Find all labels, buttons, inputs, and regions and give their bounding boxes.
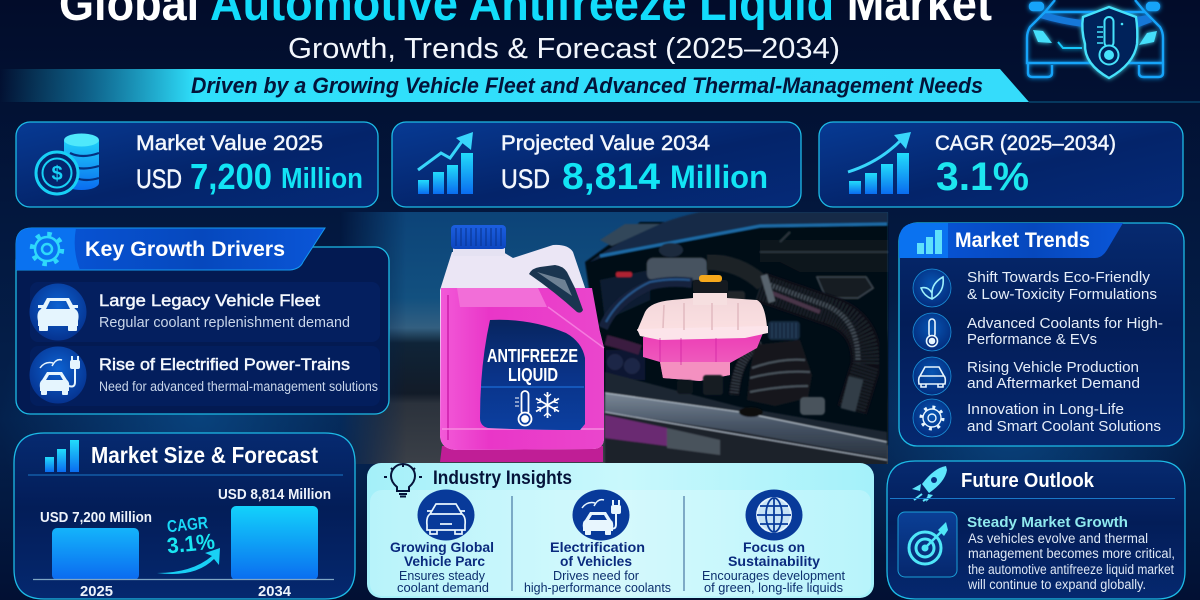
coolant reservoir: [637, 275, 768, 381]
heading: Industry Insights: [433, 467, 572, 489]
text: steady market growth: As vehicles evolve and thermal: [968, 531, 1148, 546]
text: electrification: of Vehicles: [560, 554, 632, 569]
text: steady market growth: will continue to expand globally.: [967, 577, 1146, 592]
icon: target: [898, 512, 957, 577]
radiator support: [605, 372, 887, 466]
icon: rocket: [912, 466, 947, 502]
icon: EV plug: [582, 500, 621, 535]
text: projected value figure: USD: [501, 164, 550, 194]
text: sustainability: Focus on: [743, 540, 805, 555]
text: eco-friendly: & Low-Toxicity Formulations: [967, 287, 1157, 303]
panel: projected value 2034: [392, 122, 801, 207]
bar label 2034 value: USD 8,814 Million: [218, 487, 331, 503]
heading: Key Growth Drivers: [85, 238, 285, 261]
insight: electrification: [524, 490, 671, 595]
text: vehicle production: Rising Vehicle Production: [967, 360, 1139, 376]
icon: snowflake: [536, 392, 559, 418]
arrow: [157, 548, 220, 574]
text: CAGR label: CAGR (2025–2034): [935, 132, 1116, 155]
text: legacy fleet: Large Legacy Vehicle Fleet: [99, 291, 320, 310]
text: advanced coolants: Advanced Coolants for High-: [967, 316, 1163, 332]
banner: [0, 69, 1200, 102]
icon: leaf: [921, 277, 943, 299]
text: legacy fleet: [99, 291, 350, 331]
text: steady market growth: [967, 514, 1175, 592]
text: sustainability: of green, long-life liquids: [704, 581, 843, 595]
axis label 2025: 2025: [80, 584, 113, 600]
panel: market size and forecast: [14, 433, 355, 600]
icon: bars: [45, 440, 79, 472]
text: electrified power-trains: Rise of Electrified Power-Trains: [99, 355, 350, 374]
text: electrification: Electrification: [550, 540, 645, 555]
text: innovation: [967, 402, 1161, 435]
text: advanced coolants: Performance & EVs: [967, 332, 1097, 348]
panel: CAGR: [819, 122, 1183, 207]
text: vehicle production: and Aftermarket Demand: [967, 376, 1140, 392]
trend: vehicle production: [913, 357, 1140, 395]
text: electrification: [524, 540, 671, 595]
icon: coins: $: [51, 163, 63, 185]
icon: gear: [921, 407, 943, 429]
text: electrification: high-performance coolants: [524, 581, 671, 595]
text: CAGR value: 3.1%: [936, 155, 1029, 199]
trend: eco-friendly: [913, 269, 1157, 307]
panel: industry insights: [367, 463, 874, 598]
text: electrified power-trains: Need for advanced thermal-management solutions: [99, 379, 378, 394]
header tab: [899, 223, 1123, 258]
text: projected value label: Projected Value 2034: [501, 132, 710, 155]
hose: [603, 262, 866, 410]
text: steady market growth: the automotive antifreeze liquid market: [968, 562, 1174, 577]
icon: light bulb: [384, 464, 422, 496]
text: vehicle parc: Growing Global: [390, 540, 494, 555]
text: sustainability: Sustainability: [728, 554, 821, 569]
icon: CAGR chart: [848, 132, 911, 194]
trend: advanced coolants: [913, 313, 1163, 351]
icon: globe: [757, 498, 791, 532]
text: projected value figure: Million: [670, 159, 768, 195]
text: market value label: Market Value 2025: [136, 132, 323, 155]
bottle label: ANTIFREEZE: [487, 346, 578, 366]
icon: car: [427, 504, 465, 534]
icon: car with thermometer shield: [1027, 0, 1163, 78]
text: projected value figure: [501, 156, 768, 197]
icon: thermometer: [926, 319, 938, 346]
text: vehicle parc: Ensures steady: [399, 569, 486, 583]
text: electrified power-trains: [99, 355, 378, 394]
text: steady market growth: Steady Market Growth: [967, 514, 1128, 531]
bottle reflection: [440, 446, 603, 462]
panel: market trends: [899, 223, 1184, 446]
insight: vehicle parc: [390, 490, 494, 595]
bottle label: LIQUID: [508, 365, 558, 385]
bar label 2025 value: USD 7,200 Million: [40, 510, 152, 526]
panel: future outlook: [887, 461, 1185, 599]
icon: EV with plug: [40, 356, 80, 395]
icon: coins: [36, 134, 99, 194]
icon: car: [919, 367, 945, 387]
driver: electrified power-trains: [30, 346, 380, 406]
text: eco-friendly: Shift Towards Eco-Friendly: [967, 270, 1151, 286]
text: sustainability: [702, 540, 846, 595]
engine parts: [727, 291, 812, 406]
photo: bottle and engine bay: [340, 212, 888, 466]
bottle: [440, 225, 604, 450]
panel: market value 2025: [16, 122, 378, 207]
text: electrification: Drives need for: [553, 569, 639, 583]
insight: sustainability: [702, 490, 846, 595]
heading: Market Trends: [955, 229, 1090, 252]
engine bay background: [585, 212, 888, 445]
icon: thermometer: [515, 391, 532, 426]
text: eco-friendly: [967, 270, 1157, 303]
text: vehicle parc: Vehicle Parc: [404, 554, 485, 569]
icon: car: [37, 298, 79, 331]
text: market value figure: USD: [136, 164, 182, 194]
heading: Market Size & Forecast: [91, 442, 318, 468]
text: legacy fleet: Regular coolant replenishment demand: [99, 315, 350, 331]
header tab: [16, 228, 325, 270]
text: vehicle parc: coolant demand: [397, 581, 489, 595]
CAGR callout: CAGR: [166, 513, 209, 536]
icon: gear: [32, 234, 62, 264]
text: vehicle parc: [390, 540, 494, 595]
axis label 2034: 2034: [258, 584, 291, 600]
text: innovation: and Smart Coolant Solutions: [967, 419, 1161, 435]
text: steady market growth: management becomes more critical,: [968, 546, 1175, 561]
icon: bars: [917, 230, 942, 254]
text: projected value figure: 8,814: [562, 156, 660, 197]
heading: Future Outlook: [961, 469, 1095, 492]
trend: innovation: [913, 399, 1161, 437]
icon: growth chart: [418, 132, 473, 194]
text: market value figure: 7,200: [190, 156, 272, 197]
panel: key growth drivers: [16, 228, 389, 414]
bar chart: [33, 487, 334, 600]
text: market value figure: [136, 156, 363, 197]
text: innovation: Innovation in Long-Life: [967, 402, 1124, 418]
text: advanced coolants: [967, 316, 1163, 348]
banner: Driven by a Growing Vehicle Fleet and Advanced Thermal-Management Needs: [191, 73, 983, 98]
CAGR callout: [164, 513, 216, 558]
text: market value figure: Million: [281, 163, 363, 195]
subtitle: Growth, Trends & Forecast (2025–2034): [288, 33, 840, 65]
text: vehicle production: [967, 360, 1140, 392]
driver: legacy fleet: [30, 282, 380, 342]
text: sustainability: Encourages development: [702, 569, 846, 583]
CAGR callout: 3.1%: [166, 529, 216, 558]
bottle label: [480, 320, 585, 430]
